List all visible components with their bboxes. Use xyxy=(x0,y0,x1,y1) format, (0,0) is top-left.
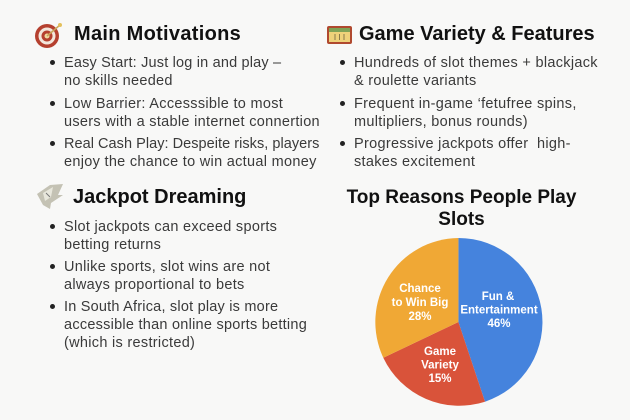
bullet 1 xyxy=(50,219,277,253)
bullet 3 xyxy=(50,136,319,170)
icon: money xyxy=(37,184,63,209)
heading: Jackpot Dreaming xyxy=(73,186,246,208)
bullet 1: betting returns xyxy=(64,237,161,253)
slice: game variety: Game xyxy=(424,346,456,358)
slice: fun and entertainment: 46% xyxy=(487,318,511,330)
bullet 3: stakes excitement xyxy=(354,154,475,170)
bullet 2: always proportional to bets xyxy=(64,277,245,293)
icon: target xyxy=(35,23,62,48)
bullet 1: Hundreds of slot themes + blackjack xyxy=(354,55,598,71)
slice: chance to win big xyxy=(375,238,458,358)
slice: game variety: 15% xyxy=(428,373,452,385)
bullet 2 xyxy=(50,259,270,293)
slice: game variety: Variety xyxy=(421,360,459,372)
bullet 3: (which is restricted) xyxy=(64,335,195,351)
heading: Main Motivations xyxy=(74,23,241,45)
bullet 1: Slot jackpots can exceed sports xyxy=(64,219,277,235)
slice: fun and entertainment: Fun & xyxy=(482,291,514,303)
bullet 3: enjoy the chance to win actual money xyxy=(64,154,317,170)
bullet 2: multipliers, bonus rounds) xyxy=(354,114,528,130)
bullet 2: Low Barrier: Accesssible to most xyxy=(64,96,283,112)
bullet 3: accessible than online sports betting xyxy=(64,317,307,333)
slice: game variety xyxy=(383,322,485,406)
bullet 2 xyxy=(50,96,320,130)
heading: Game Variety & Features xyxy=(359,23,595,45)
chart title: Top Reasons People Play Slots xyxy=(347,187,576,230)
bullet 1 xyxy=(50,55,282,89)
bullet 3 xyxy=(340,136,571,170)
icon: slot machine xyxy=(327,26,352,44)
bullet 1 xyxy=(340,55,598,89)
slice: chance to win big: 28% xyxy=(408,311,432,323)
bullet 2 xyxy=(340,96,577,130)
bullet 1: Easy Start: Just log in and play – xyxy=(64,55,281,71)
bullet 2: Unlike sports, slot wins are not xyxy=(64,259,270,275)
bullet 1: no skills needed xyxy=(64,73,173,89)
slice: fun and entertainment: Entertainment xyxy=(460,304,538,316)
slice: chance to win big: Chance xyxy=(399,283,441,295)
bullet 3: Progressive jackpots offer high- xyxy=(354,136,571,152)
slice: fun and entertainment xyxy=(458,238,542,402)
bullet 3: Real Cash Play: Despeite risks, players xyxy=(64,136,319,152)
slice: chance to win big: to Win Big xyxy=(392,297,448,309)
bullet 1: & roulette variants xyxy=(354,73,477,89)
bullet 3 xyxy=(50,299,307,351)
panel: game variety and features xyxy=(327,23,598,170)
bullet 2: Frequent in-game ‘fetufree spins, xyxy=(354,96,577,112)
bullet 2: users with a stable internet connertion xyxy=(64,114,320,130)
panel: jackpot dreaming xyxy=(37,184,307,351)
panel: main motivations xyxy=(35,23,320,170)
bullet 3: In South Africa, slot play is more xyxy=(64,299,278,315)
